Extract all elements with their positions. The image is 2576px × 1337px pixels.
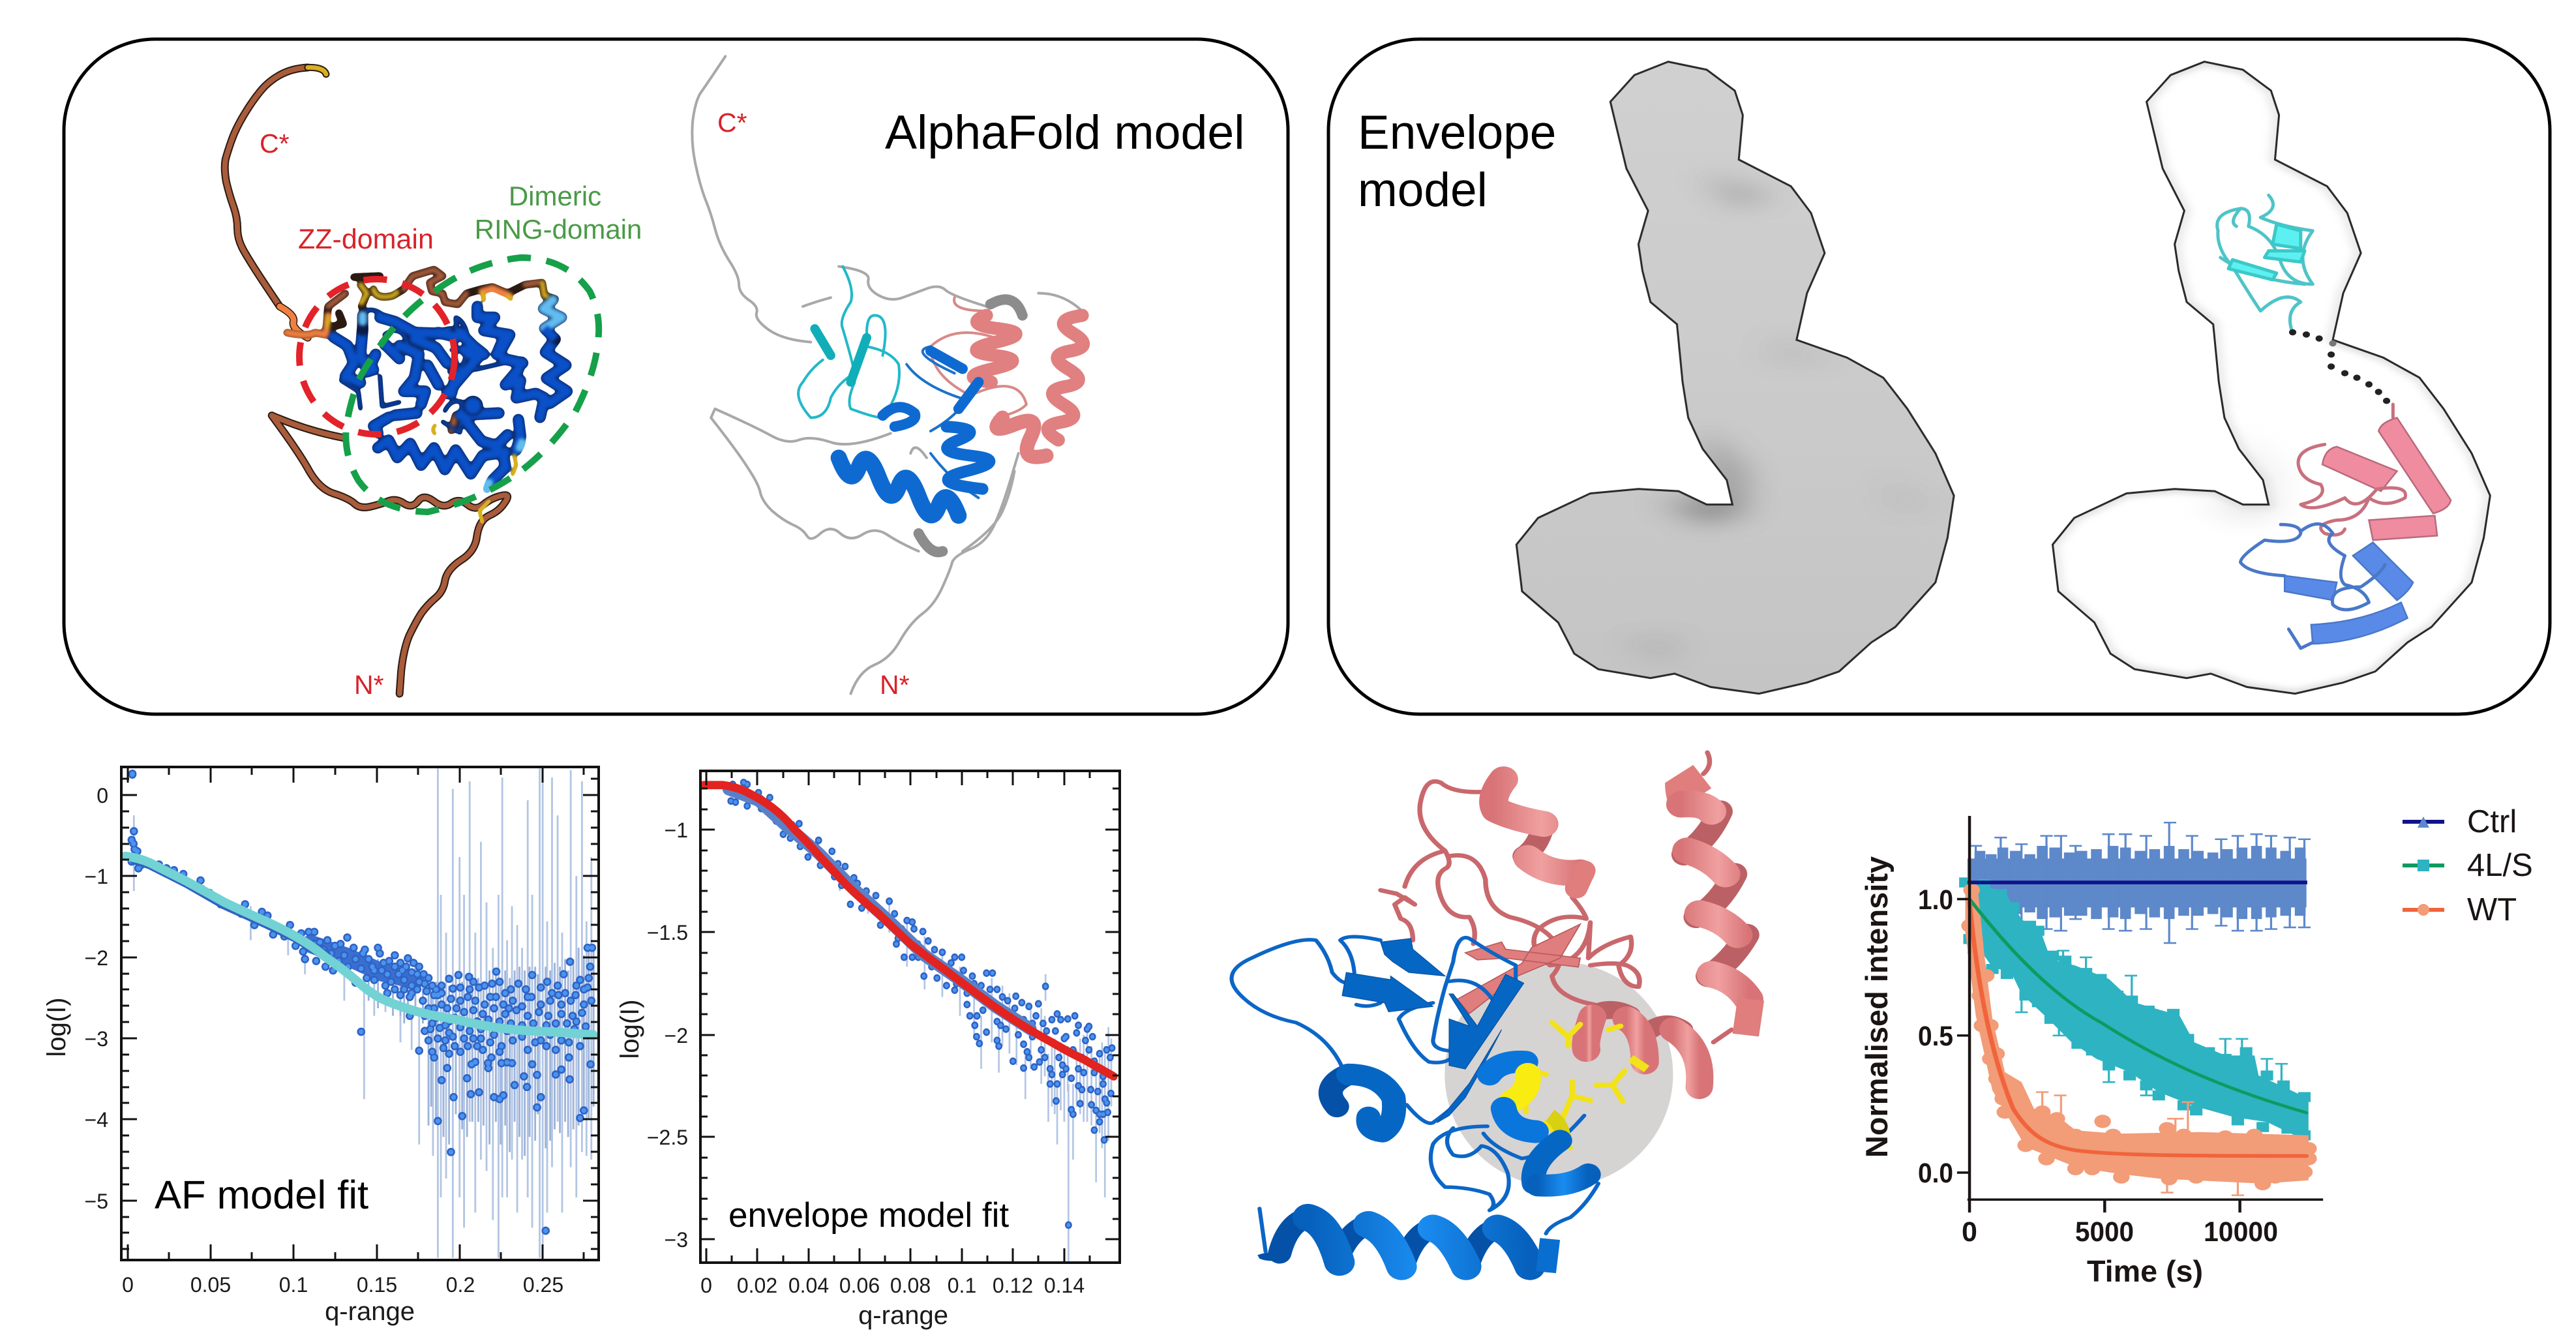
- chart: envelope model fit: [616, 771, 1120, 1330]
- chart label: AF model fit: [155, 1173, 368, 1218]
- data points and fit: [704, 783, 1114, 1263]
- y axis title: log(I): [616, 999, 644, 1059]
- y tick labels: −2: [85, 946, 108, 970]
- right pink helix: [1684, 811, 1747, 976]
- grey linkers: [692, 56, 1086, 694]
- envelope: grey surface: [1516, 62, 1954, 694]
- error bars: [134, 768, 592, 1258]
- y tick labels: 1.0: [1918, 884, 1953, 916]
- error bars: [818, 838, 1111, 1263]
- lower pink helix: [1591, 1010, 1683, 1030]
- heading: Envelope model: Envelope: [1358, 106, 1556, 159]
- callout: dimeric RING-domain ellipse: [346, 258, 599, 512]
- x tick labels: 0.05: [190, 1273, 231, 1297]
- label: Dimeric RING-domain: RING-domain: [475, 214, 642, 245]
- blue structure: [1232, 937, 1598, 1252]
- x tick labels: 0.02: [737, 1274, 777, 1297]
- docked ZZ domain: [2217, 195, 2313, 333]
- x tick labels: 0.06: [839, 1274, 880, 1297]
- y tick labels: [647, 819, 688, 1252]
- x tick labels: [1962, 1216, 2278, 1248]
- legend: WT: [2403, 892, 2517, 927]
- x tick labels: 0: [122, 1273, 134, 1297]
- x tick labels: 0.08: [890, 1274, 931, 1297]
- y tick labels: [1918, 884, 1953, 1189]
- chart: AF model fit: [42, 767, 599, 1326]
- legend: [2403, 804, 2533, 927]
- y tick labels: 0.5: [1918, 1021, 1953, 1052]
- axes frame: [121, 767, 599, 1260]
- label: N-terminus left: N*: [354, 670, 384, 700]
- docked blue RING subunit: [2241, 524, 2413, 648]
- data points and fit: [125, 768, 593, 1258]
- y tick labels: −1: [665, 819, 688, 842]
- WT error band: [1966, 889, 2309, 1184]
- x tick labels: 5000: [2075, 1216, 2134, 1248]
- envelope: transparent surface with docked domains: [2053, 62, 2490, 694]
- top pink helix: [1524, 824, 1544, 856]
- y axis title: Normalised intensity: [1859, 856, 1894, 1158]
- x tick labels: [700, 1274, 1085, 1297]
- grey highlight circle: [1445, 962, 1673, 1187]
- label: Dimeric RING-domain: Dimeric: [509, 181, 601, 211]
- Ctrl error band: [1968, 858, 2307, 907]
- heading: AlphaFold model: AlphaFold model: [885, 105, 1245, 159]
- axes frame: [700, 771, 1120, 1263]
- legend: 4L/S: 4L/S: [2467, 848, 2533, 883]
- x tick labels: [122, 1273, 563, 1297]
- y tick labels: [85, 784, 108, 1213]
- legend: Ctrl: Ctrl: [2467, 804, 2517, 839]
- data series: [1957, 816, 2323, 1212]
- chart label: envelope model fit: [728, 1196, 1009, 1235]
- structure: AlphaFold confidence-coloured model: [225, 67, 567, 694]
- label: C-terminus left: C*: [260, 128, 290, 158]
- x tick labels: 0.12: [993, 1274, 1033, 1297]
- structure: RING dimer close-up: [1232, 753, 1751, 1272]
- y tick labels: −2: [665, 1024, 688, 1047]
- x tick labels: 0.15: [357, 1273, 397, 1297]
- y tick labels: −4: [85, 1108, 108, 1132]
- linker dots: [2289, 329, 2390, 404]
- small blue helix: [1330, 1074, 1348, 1107]
- structure: domain-coloured cartoon: [692, 56, 1086, 694]
- blue RING part: [906, 346, 978, 498]
- x tick labels: 0.25: [523, 1273, 563, 1297]
- x tick labels: 0.14: [1044, 1274, 1085, 1297]
- label: C-terminus right: C*: [717, 108, 747, 138]
- blue helices: [1280, 1059, 1647, 1272]
- label: N-terminus right: N*: [880, 670, 910, 700]
- chart: fluorescence time course: [1859, 816, 2323, 1288]
- y tick labels: −3: [665, 1228, 688, 1252]
- y tick labels: −1.5: [647, 921, 688, 944]
- x axis title: q-range: [858, 1301, 948, 1330]
- 4L/S error band: [1966, 879, 2309, 1142]
- x tick labels: 0: [1962, 1216, 1977, 1248]
- y tick labels: −3: [85, 1027, 108, 1051]
- panel: AlphaFold model: [64, 39, 1288, 714]
- x tick labels: 0.1: [948, 1274, 976, 1297]
- y tick labels: 0.0: [1918, 1158, 1953, 1189]
- axes: [1957, 816, 2323, 1212]
- x tick labels: 0.1: [279, 1273, 308, 1297]
- fit lines: [1968, 879, 2307, 886]
- legend: WT: WT: [2467, 892, 2517, 927]
- x tick labels: 10000: [2204, 1216, 2278, 1248]
- tick marks: [700, 771, 1120, 1263]
- yellow side chains: [1520, 1023, 1625, 1148]
- legend: 4L/S: [2403, 848, 2533, 883]
- pink RING part: [931, 297, 1026, 418]
- cyan ZZ domain: [798, 266, 899, 418]
- x tick labels: 0: [700, 1274, 712, 1297]
- heading: Envelope model: model: [1358, 164, 1488, 217]
- y tick labels: −1: [85, 865, 108, 888]
- pink helices: [1493, 765, 1751, 1087]
- x axis title: q-range: [325, 1297, 415, 1326]
- y tick labels: −5: [85, 1190, 108, 1213]
- pink loops: [1381, 753, 1731, 1042]
- legend: Ctrl: [2403, 804, 2517, 839]
- y axis title: log(I): [42, 997, 71, 1057]
- y tick labels: 0: [97, 784, 108, 807]
- tick marks: [121, 767, 599, 1260]
- docked pink RING subunit: [2298, 404, 2451, 540]
- long blue helix: [1280, 1218, 1497, 1268]
- panel: Envelope model: [1328, 39, 2550, 714]
- y tick labels: −2.5: [647, 1126, 688, 1149]
- x tick labels: 0.04: [788, 1274, 829, 1297]
- x tick labels: 0.2: [446, 1273, 475, 1297]
- pink strands: [1457, 924, 1580, 1014]
- central helix: [1490, 1062, 1526, 1074]
- x axis title: Time (s): [2087, 1254, 2203, 1288]
- label: ZZ-domain: ZZ-domain: [298, 224, 434, 255]
- callout: ZZ-domain circle: [299, 279, 455, 434]
